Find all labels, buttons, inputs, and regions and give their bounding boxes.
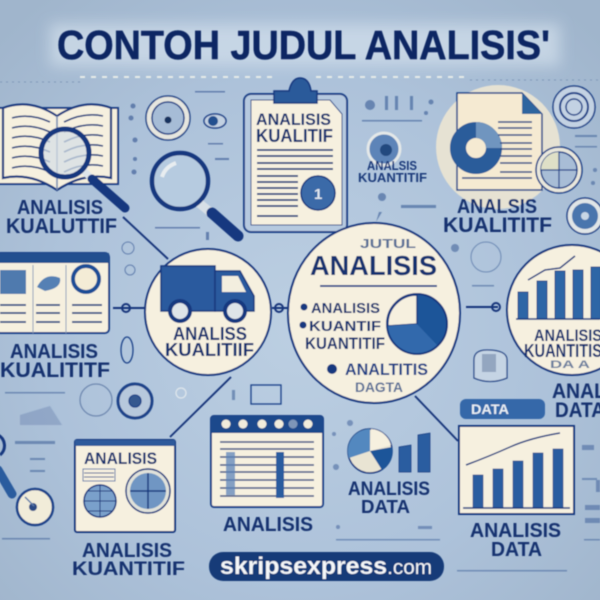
label: analisis kualitiif top-left: ANALISIS — [17, 197, 103, 219]
small analisis icon group: KUANTITIF — [358, 170, 427, 185]
icon: quadrant circle — [536, 147, 582, 193]
chart: pie and bars — [348, 429, 430, 473]
icon: magnifier — [152, 153, 238, 236]
panel: clipboard — [244, 78, 347, 232]
icon: numbered badge: 1 — [314, 186, 322, 203]
central heading — [310, 236, 437, 281]
central list — [300, 300, 428, 395]
clipboard heading — [256, 110, 333, 146]
decorative small marks — [362, 96, 436, 222]
clipboard heading: KUALITIF — [256, 126, 333, 146]
label: analisis data bottom — [470, 520, 561, 561]
title: CONTOH JUDUL ANALISIS' — [57, 22, 550, 68]
central list: DAGTA — [355, 379, 403, 395]
icon: eye — [204, 114, 226, 128]
label: analisis kualitif top-right — [443, 196, 552, 237]
icon: globe small — [84, 485, 116, 517]
panel: left dashboard — [0, 253, 109, 333]
icon: partial magnifier left — [0, 435, 12, 494]
label: analisis kualitif top-right: KUALITITF — [443, 214, 552, 237]
label: analisis data middle: ANALISIS — [348, 479, 430, 500]
panel: right chart circle: DA A — [550, 359, 590, 371]
icon: ring target — [146, 96, 190, 140]
panel: truck circle — [145, 249, 271, 375]
central list: ANALISIS — [311, 300, 380, 317]
label: analisis data bottom: ANALISIS — [470, 520, 561, 542]
panel: analisis kuantitatif card: ANALISIS — [84, 449, 157, 468]
panel: analisis kuantitatif card — [75, 440, 175, 532]
decorative small marks — [332, 420, 600, 572]
icon: magnifier on book — [41, 129, 125, 208]
label: analisis kualitiif left: KUALITITF — [0, 359, 110, 382]
central list: ANALTITIS — [345, 360, 428, 379]
icon: device — [474, 350, 507, 382]
label: analisis data right edge — [552, 380, 600, 422]
icon: truck — [161, 266, 254, 321]
central list: KUANTITIF — [305, 334, 385, 353]
main central circle — [288, 223, 460, 403]
icon: decorative small icons — [80, 337, 281, 418]
label: analisis kualitiif left: ANALISIS — [10, 341, 98, 363]
panel: truck circle: ANALISS — [173, 324, 247, 344]
icon: dial — [17, 489, 53, 525]
label: data pill: DATA — [471, 401, 509, 417]
icon: globe large — [126, 469, 170, 513]
bar chart — [518, 267, 600, 319]
label: analisis kualitiif top-left — [6, 197, 117, 238]
central list: KUANTIF — [309, 318, 381, 335]
icon: rings — [553, 86, 595, 128]
small decorative marks — [122, 91, 229, 275]
panel: right chart circle — [507, 245, 600, 375]
clipboard heading: ANALISIS — [256, 110, 331, 129]
label: analisis browser: ANALISIS — [223, 514, 313, 536]
icon: numbered badge — [301, 176, 335, 210]
label: analisis data middle — [348, 479, 430, 517]
label: analisis kuantitif: ANALISIS — [82, 540, 172, 562]
pie chart — [387, 294, 447, 354]
panel: browser window — [211, 416, 323, 507]
panel: line and bar chart — [459, 426, 574, 514]
label: analisis kualitif top-right: ANALSIS — [457, 196, 537, 218]
label: analisis kuantitif — [72, 540, 185, 580]
panel: truck circle: KUALITIIF — [165, 340, 254, 360]
icon: open book — [0, 104, 118, 190]
label: analisis data middle: DATA — [361, 497, 410, 517]
icon: small badge — [567, 198, 600, 234]
central heading: JUTUL — [360, 236, 416, 251]
donut chart — [458, 122, 502, 166]
brand pill: skripsexpress .com — [220, 553, 432, 580]
panel: document with donut — [436, 85, 560, 209]
label: analisis kuantitif: KUANTITIF — [72, 559, 185, 580]
label: analisis data bottom: DATA — [491, 539, 542, 561]
label: analisis kualitiif left — [0, 341, 110, 382]
connector lines — [113, 217, 500, 441]
small analisis icon group — [358, 133, 427, 185]
label: analisis kualitiif top-left: KUALUTTIF — [6, 215, 117, 238]
decorative small marks — [451, 135, 597, 286]
label: data pill — [460, 399, 545, 419]
small analisis icon group: ANALSIS — [367, 158, 417, 173]
central heading: ANALISIS — [310, 250, 437, 281]
